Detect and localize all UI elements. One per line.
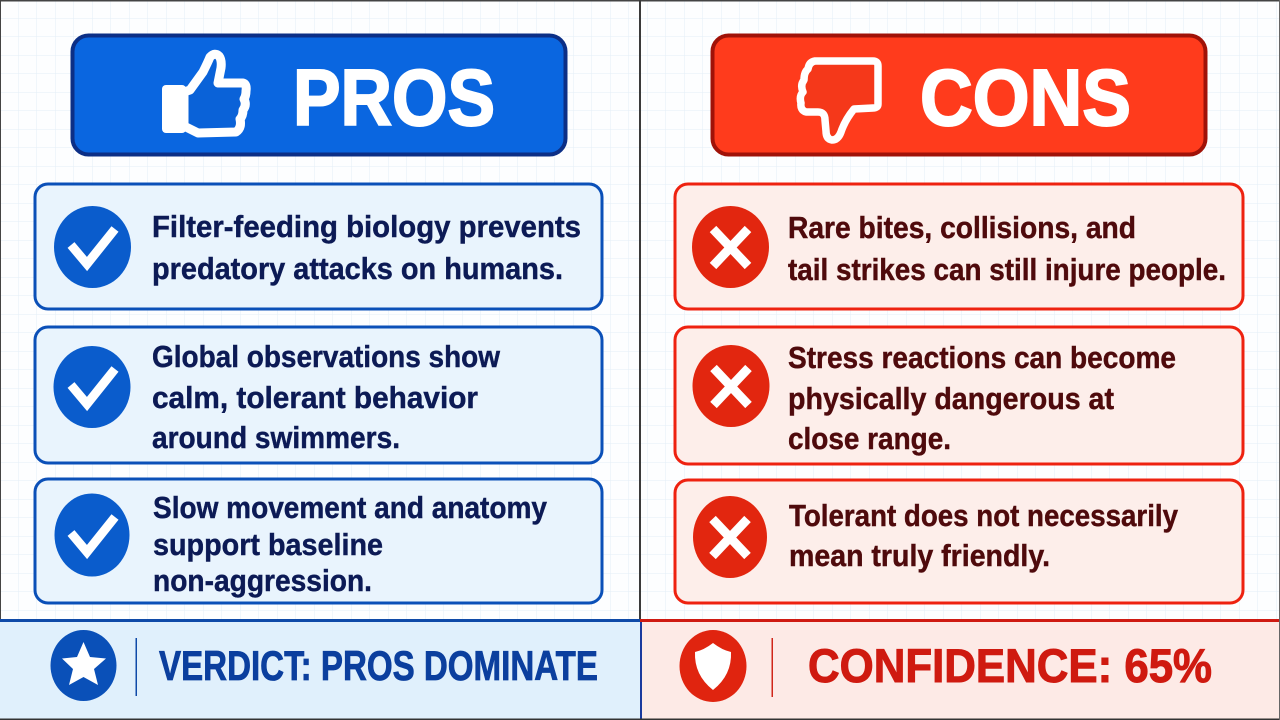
pros card 3	[35, 479, 602, 603]
cons text 1	[788, 210, 1226, 287]
panel: pros column	[35, 36, 602, 603]
panel: confidence footer	[640, 619, 1280, 720]
cons text 2: physically dangerous at	[788, 381, 1114, 416]
icon: cross	[692, 206, 769, 288]
pros text 1: predatory attacks on humans.	[152, 251, 563, 286]
pros card 1	[35, 184, 602, 309]
icon: check	[54, 206, 131, 288]
pros heading: PROS	[293, 53, 495, 142]
icon: thumbs down	[800, 61, 878, 140]
cons text 1: tail strikes can still injure people.	[788, 252, 1226, 287]
pros text 3: support baseline	[153, 527, 383, 562]
cons heading: CONS	[920, 53, 1131, 142]
cons text 2: Stress reactions can become	[788, 340, 1176, 375]
pros text 3	[153, 490, 548, 598]
pros text 1	[152, 209, 581, 286]
icon: cross	[692, 345, 770, 427]
pros text 2: Global observations show	[152, 339, 501, 374]
cons text 3	[789, 498, 1179, 573]
confidence text: CONFIDENCE: 65%	[808, 639, 1212, 692]
pros card 2	[35, 327, 602, 463]
cons header banner	[712, 36, 1206, 154]
cons card 2	[675, 327, 1243, 464]
cons card 3	[675, 480, 1243, 603]
cons text 3: mean truly friendly.	[789, 538, 1050, 573]
pros header banner	[72, 36, 566, 154]
pros text 1: Filter-feeding biology prevents	[152, 209, 581, 244]
pros text 2: calm, tolerant behavior	[152, 380, 478, 415]
icon: shield badge	[680, 630, 746, 702]
pros text 3: non-aggression.	[153, 563, 372, 598]
verdict text: VERDICT: PROS DOMINATE	[159, 642, 598, 689]
icon: thumbs up	[162, 54, 246, 133]
icon: check	[54, 346, 130, 428]
panel: cons column	[675, 36, 1243, 603]
cons text 1: Rare bites, collisions, and	[788, 210, 1136, 245]
pros text 2: around swimmers.	[152, 420, 400, 455]
panel: verdict footer	[0, 619, 640, 720]
pros text 3: Slow movement and anatomy	[153, 490, 548, 525]
cons text 3: Tolerant does not necessarily	[789, 498, 1179, 533]
cons text 2: close range.	[788, 421, 951, 456]
icon: check	[54, 494, 130, 576]
cons card 1	[675, 184, 1243, 309]
icon: cross	[693, 496, 767, 578]
icon: star badge	[50, 630, 116, 701]
pros text 2	[152, 339, 501, 455]
cons text 2	[788, 340, 1176, 456]
